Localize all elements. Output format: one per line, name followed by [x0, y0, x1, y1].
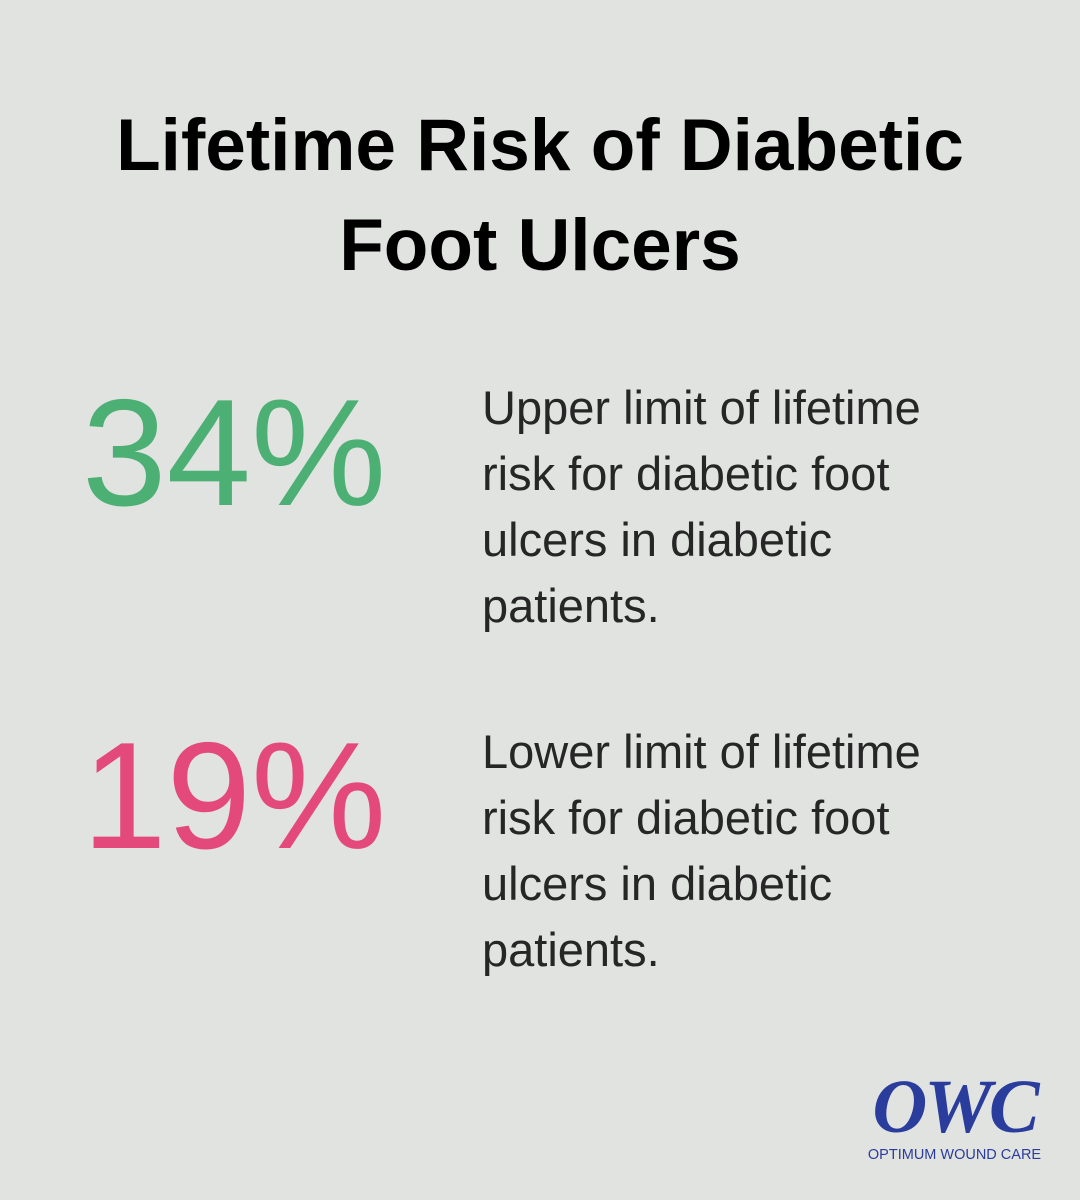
stat: 34%: 34%: [82, 368, 386, 538]
title: Foot Ulcers: [339, 205, 741, 286]
logo: OWC: [872, 1065, 1037, 1149]
title: Lifetime Risk of Diabetic: [116, 105, 964, 186]
text: lower limit: Lower limit of lifetime risk for diabetic foot ulcers in diabetic patients.: [482, 725, 921, 976]
stat: 19%: 19%: [82, 711, 386, 881]
logo: OPTIMUM WOUND CARE: [868, 1147, 1041, 1163]
text: upper limit: Upper limit of lifetime risk for diabetic foot ulcers in diabetic patients.: [482, 381, 921, 632]
title: [116, 105, 964, 286]
